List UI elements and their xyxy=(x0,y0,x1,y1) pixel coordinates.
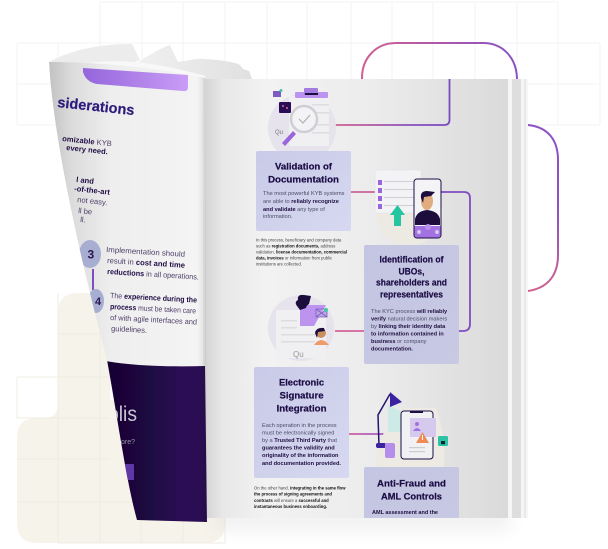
text block: validation notes: license documentation, commercial xyxy=(276,250,347,254)
body: linking their identity data xyxy=(379,324,446,330)
footer prompt: Want to know more? xyxy=(71,439,135,446)
body: The KYC process xyxy=(371,309,417,315)
connector: signature to identification xyxy=(335,330,364,332)
heading: Electronic xyxy=(279,378,324,388)
heading xyxy=(268,162,338,183)
body: originality of the information xyxy=(262,453,339,459)
heading xyxy=(276,378,327,414)
body: natural decision makers xyxy=(388,316,447,322)
text block: state of the art xyxy=(74,175,111,225)
icon: document validation: Qu xyxy=(275,130,283,136)
text block: validation notes: data, invoices xyxy=(256,256,285,260)
body: business xyxy=(371,339,397,345)
outer connector: top loop xyxy=(362,43,517,80)
page edge strips xyxy=(508,79,528,518)
connector: signature to anti-fraud xyxy=(349,433,384,435)
purple tab xyxy=(83,68,188,91)
text block: signature notes: integrating in the same flow xyxy=(290,486,346,490)
body: are able to xyxy=(263,199,291,205)
body: information. xyxy=(263,214,293,220)
beige backdrop shape xyxy=(17,293,225,543)
text block: customizable: omizable KYB xyxy=(62,134,112,148)
body: to information contained in xyxy=(371,332,444,338)
body: and documentation provided. xyxy=(262,461,341,467)
heading: Anti-Fraud and xyxy=(377,478,446,490)
text block: state of the art: ll. xyxy=(80,215,86,225)
background grid top xyxy=(17,2,600,125)
text block: experience: guidelines. xyxy=(111,324,147,335)
text block: implementation: result in cost and time xyxy=(107,256,185,270)
text block: validation notes: registration documents, address xyxy=(272,244,335,248)
body: by xyxy=(371,324,379,330)
body: guarantees the validity and xyxy=(262,446,335,452)
heading: AML Controls xyxy=(381,492,442,502)
body: any type of xyxy=(297,207,325,213)
text block: signature notes: contracts xyxy=(254,498,274,503)
icon: electronic signature xyxy=(268,295,334,361)
text block: state of the art: l and xyxy=(76,175,95,186)
body: verify xyxy=(371,316,388,322)
panel: validation of documentation xyxy=(256,151,351,231)
text block: signature notes: On the other hand, xyxy=(254,486,290,490)
icon: anti-fraud lamp and phone xyxy=(376,392,448,467)
body: documentation. xyxy=(371,346,413,352)
body: must be electronically signed xyxy=(262,431,334,437)
body: and validate xyxy=(263,207,297,213)
text block: state of the art: ll be xyxy=(78,206,93,216)
page heading: siderations xyxy=(57,95,135,119)
body: AML assessment and the xyxy=(372,510,438,516)
step 3 badge xyxy=(79,240,101,290)
connector: validation to top xyxy=(335,79,450,125)
panel: electronic signature integration xyxy=(254,367,349,478)
heading: Identification of xyxy=(380,254,444,266)
heading: Validation of xyxy=(275,162,333,172)
text block: experience xyxy=(110,291,197,335)
icon: electronic signature: Qu xyxy=(293,350,304,359)
heading xyxy=(376,254,447,300)
text block: signature notes: will ensure a successful and xyxy=(274,498,329,503)
page fold shade xyxy=(203,78,206,447)
heading: Integration xyxy=(276,404,327,414)
step 4 badge: 4 xyxy=(95,296,102,308)
text block: experience: of with agile interfaces and xyxy=(110,313,197,327)
text block: validation notes: validation, xyxy=(256,250,276,254)
step 3 badge: 3 xyxy=(88,248,94,262)
book drop shadow xyxy=(215,508,510,530)
footer button xyxy=(124,464,134,480)
text block: signature notes: the process of signing agreements and xyxy=(254,492,332,496)
right page xyxy=(205,79,508,527)
open book xyxy=(49,44,528,527)
background grid bottom xyxy=(17,293,225,543)
text block: validation notes: such as xyxy=(256,244,272,248)
text block: implementation: Implementation should xyxy=(106,245,185,259)
back page fans xyxy=(49,44,252,80)
icon: phone identification xyxy=(375,170,443,245)
body: will reliably xyxy=(416,309,448,315)
logo text: olis xyxy=(108,403,137,426)
icon: document validation xyxy=(268,88,336,151)
left curled page xyxy=(49,62,207,522)
body: Each operation in the process xyxy=(262,423,337,429)
heading xyxy=(377,480,446,500)
heading: UBOs, xyxy=(398,266,424,278)
body: or company xyxy=(397,339,427,345)
text block: experience: The experience during the xyxy=(110,291,197,305)
connector: validation to identification xyxy=(351,191,375,193)
text block: validation notes: In this process, beneficiary and company data xyxy=(256,238,342,242)
text block: implementation xyxy=(106,245,199,282)
body: reliably recognize xyxy=(291,199,339,205)
heading: representatives xyxy=(380,290,443,300)
dark footer band xyxy=(100,360,207,522)
connector: phone to panel xyxy=(440,192,470,331)
heading: shareholders and xyxy=(376,278,447,288)
text block: signature notes: instantaneous business onboarding. xyxy=(254,504,327,509)
text block: state of the art: -of-the-art xyxy=(74,184,111,197)
text block: customizable: every need. xyxy=(66,143,108,156)
text block: validation notes: institutions are collected. xyxy=(256,262,302,266)
text block: customizable xyxy=(62,136,112,154)
panel: identification of UBOs xyxy=(364,245,459,364)
heading: Documentation xyxy=(268,174,339,186)
body: Trusted Third Party that xyxy=(274,438,337,444)
panel: anti-fraud and AML controls xyxy=(364,467,459,518)
text block: validation notes: or information from public xyxy=(285,256,332,260)
step 4 badge xyxy=(90,289,104,313)
text block: state of the art: not easy. xyxy=(77,195,108,207)
text block: implementation: reductions in all operations. xyxy=(107,267,199,282)
body: The most powerful KYB systems xyxy=(263,191,345,197)
body: by a xyxy=(262,438,274,444)
text block: experience: process must be taken care xyxy=(110,302,196,315)
outer connector: right loop xyxy=(528,125,558,291)
heading: Signature xyxy=(280,390,324,402)
